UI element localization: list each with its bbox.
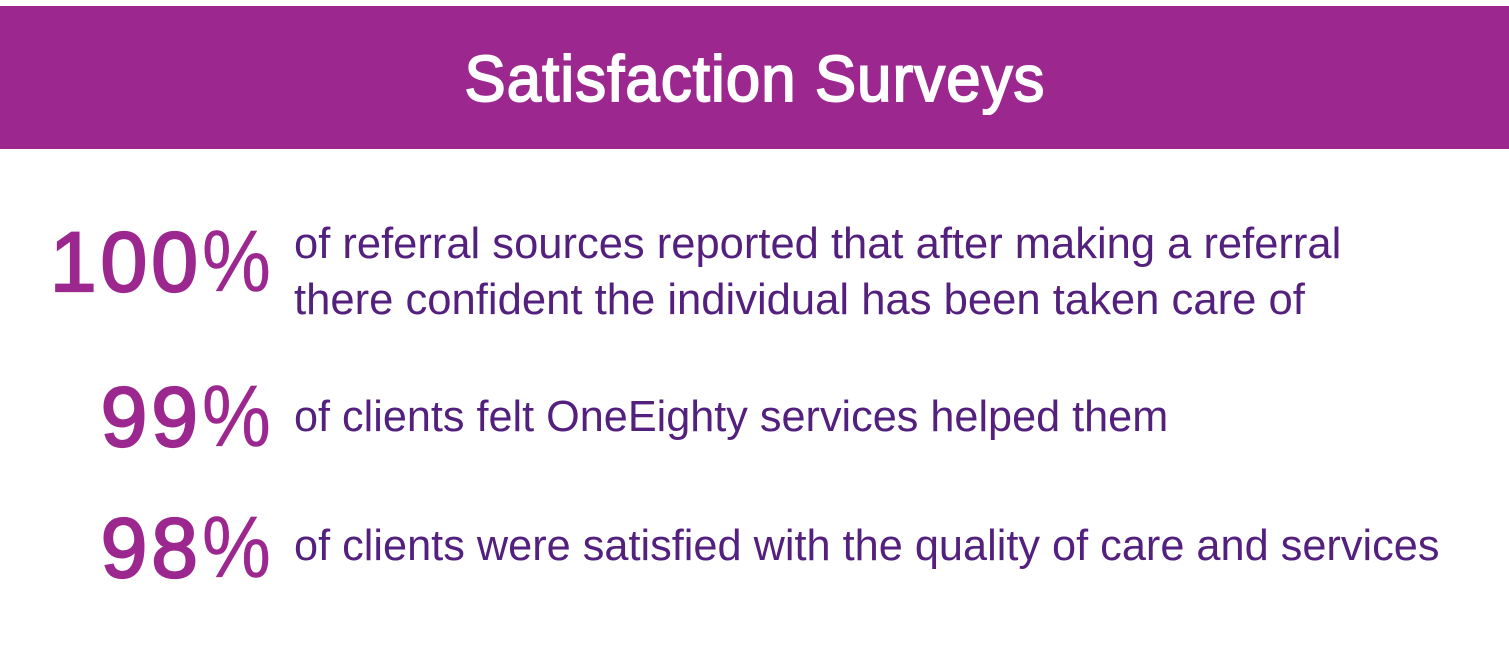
stat: 98%: % [202, 499, 271, 596]
stat: 99%: % [202, 368, 271, 465]
stat: 99%: 99 [101, 370, 202, 464]
text: 100% description: of referral sources reported that after making a referral [294, 219, 1341, 268]
text: 100% description [294, 219, 1341, 324]
title: Satisfaction Surveys [464, 42, 1046, 115]
stat: 98% [101, 499, 271, 596]
stat: 100%: % [202, 213, 271, 310]
text: 99% description: of clients felt OneEighty services helped them [294, 392, 1168, 441]
text: 100% description: there confident the individual has been taken care of [294, 275, 1305, 324]
header banner [0, 6, 1509, 149]
stat: 98%: 98 [101, 501, 202, 595]
text: 98% description: of clients were satisfied with the quality of care and services [294, 521, 1439, 570]
stat: 100% [50, 213, 271, 310]
stat: 99% [101, 368, 271, 465]
stat: 100%: 100 [50, 215, 202, 309]
